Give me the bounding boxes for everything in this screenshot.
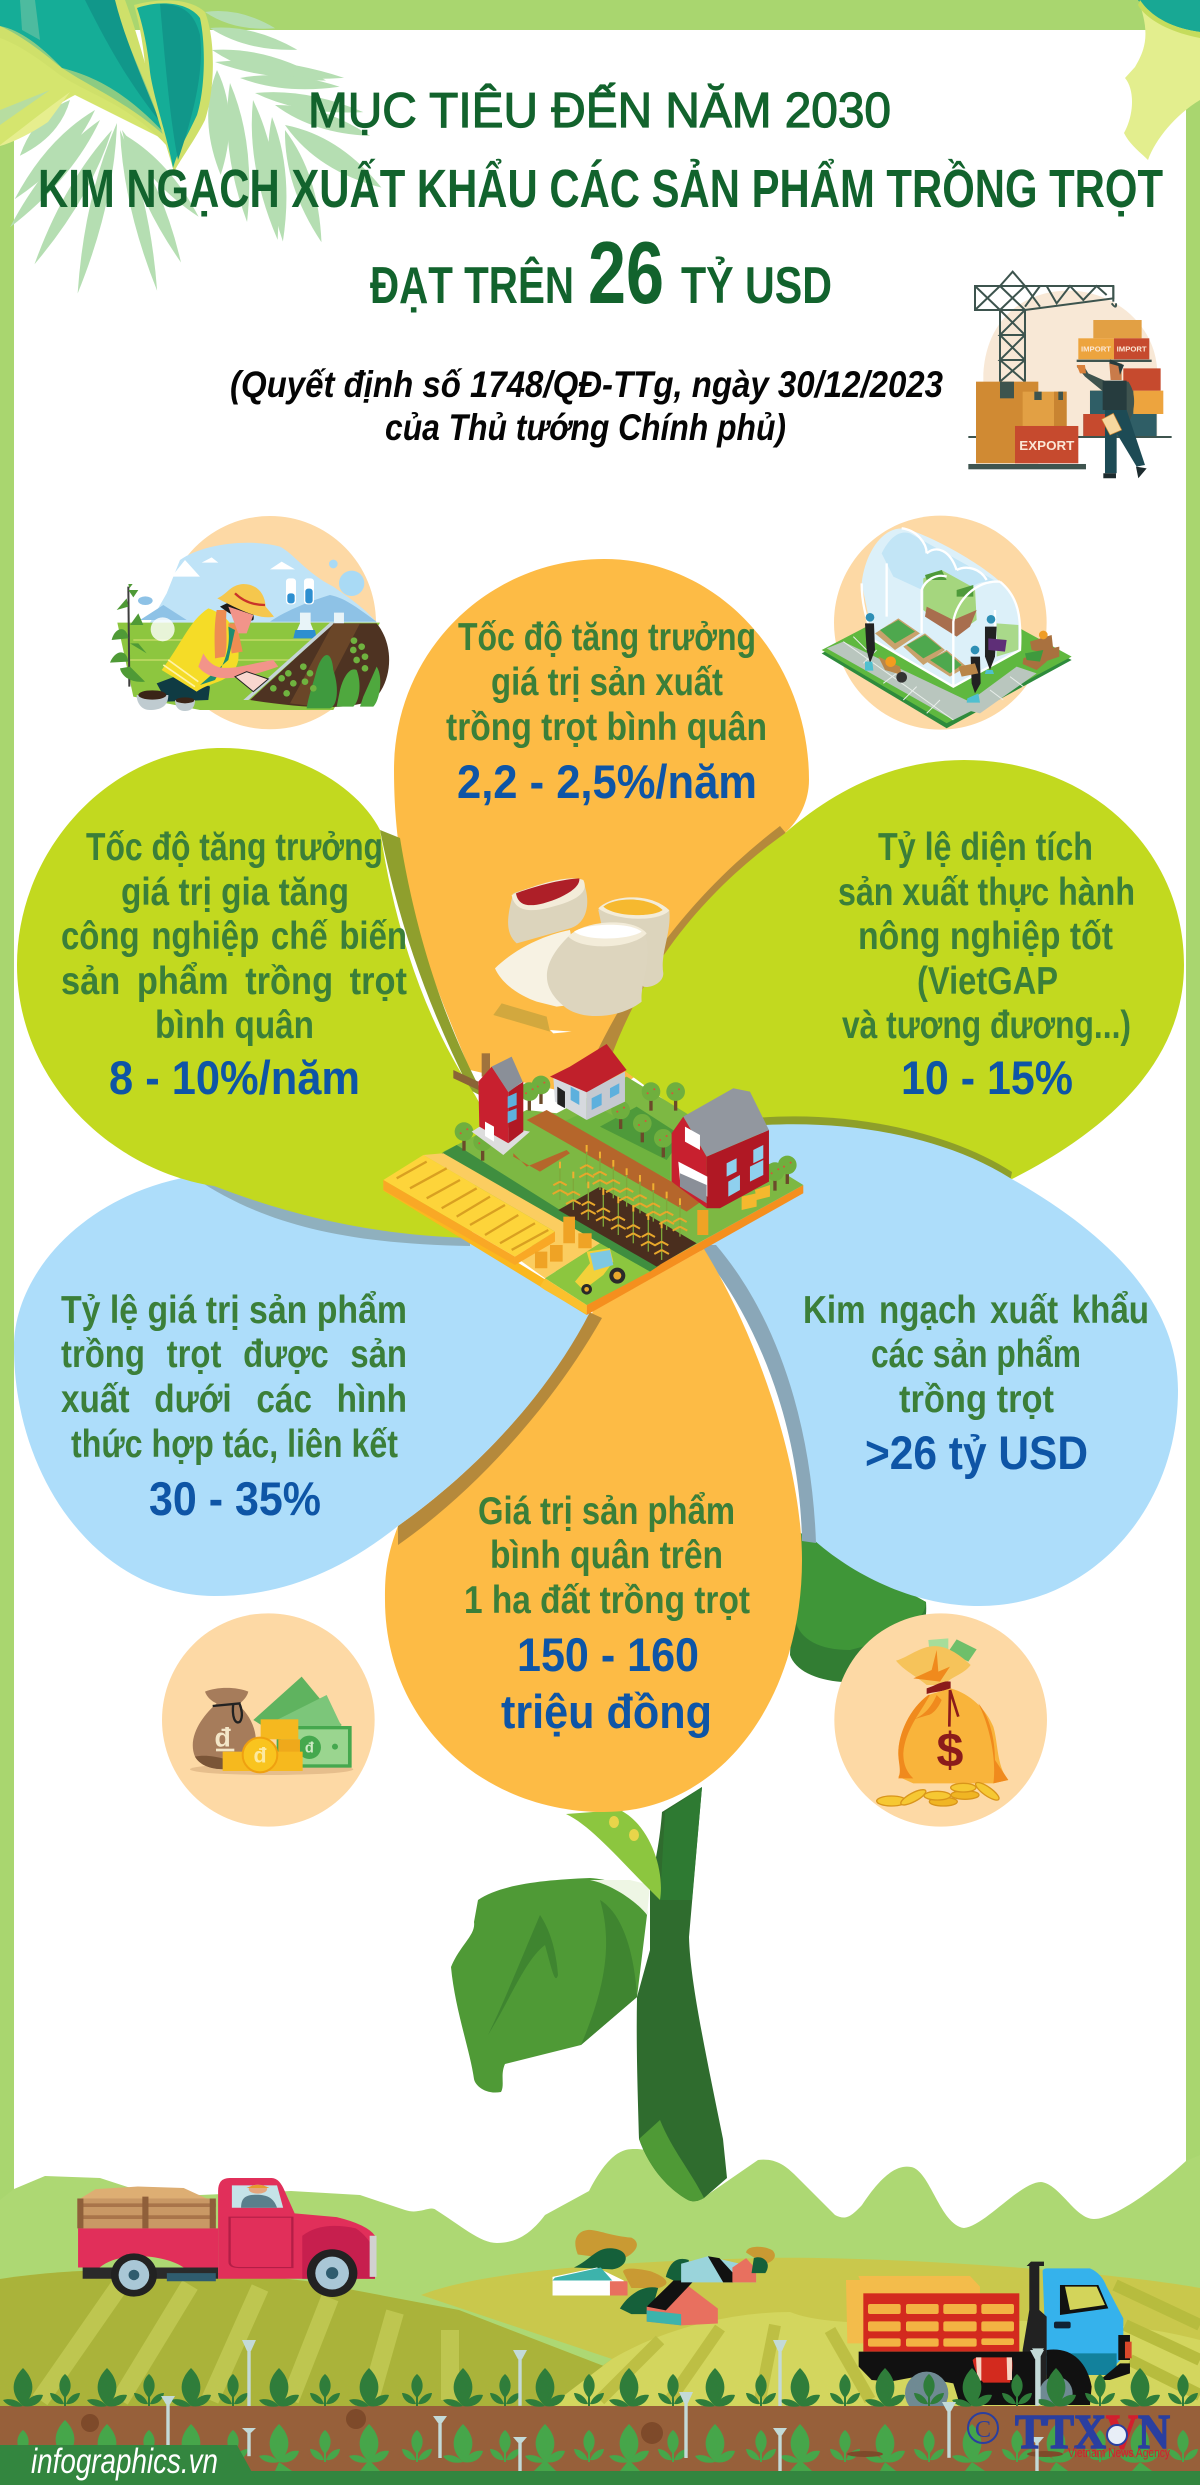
- title: TỶ USD: [681, 256, 832, 315]
- panel: bottom petal - value per hectare: [385, 1249, 802, 1812]
- panel: bottom petal - value per hectare: 150 - 160: [517, 1628, 699, 1681]
- panel: right green petal - good agricultural practice: 10 - 15%: [901, 1051, 1073, 1104]
- flower bud: [566, 1810, 661, 1900]
- lower plant row: [8, 2420, 1198, 2471]
- title: [38, 84, 1163, 322]
- subtitle: [230, 364, 943, 448]
- panel: left green petal - processing industry growth: sản phẩm trồng trọt: [61, 960, 407, 1003]
- irrigation sprinklers: [161, 2340, 1044, 2471]
- icon: money circle: đ: [253, 1744, 267, 1768]
- panel: left blue petal - cooperation share: trồng trọt được sản: [61, 1333, 407, 1376]
- panel: left blue petal - cooperation share: [14, 1175, 602, 1596]
- upper stem leaf: [790, 1530, 926, 1682]
- panel: right green petal - good agricultural practice: nông nghiệp tốt: [858, 915, 1113, 958]
- panel: right blue petal - export turnover: trồng trọt: [899, 1378, 1054, 1421]
- panel: left green petal - processing industry growth: giá trị gia tăng: [121, 871, 349, 914]
- flower stem: [637, 1787, 727, 2201]
- site label: infographics.vn: infographics.vn: [31, 2442, 218, 2481]
- icon: export crane, containers and worker: [968, 272, 1172, 478]
- icon: export crane, containers and worker: IMPORT: [1081, 345, 1112, 354]
- background landscape: hills: [0, 2149, 1200, 2420]
- panel: right green petal - good agricultural practice: sản xuất thực hành: [838, 871, 1135, 914]
- subtitle: của Thủ tướng Chính phủ): [385, 407, 786, 448]
- icon: export crane, containers and worker: EXPORT: [1019, 439, 1075, 453]
- icon: farmer and lab circle: [110, 516, 389, 729]
- panel: right green petal - good agricultural practice: (VietGAP: [917, 960, 1058, 1003]
- icon: money circle: đ: [215, 1723, 232, 1753]
- icon: blue cargo truck: [846, 2262, 1132, 2415]
- panel: right blue petal - export turnover: các sản phẩm: [871, 1333, 1081, 1376]
- icon: small houses: [553, 2230, 775, 2325]
- icon: export crane, containers and worker: IMPORT: [1117, 345, 1147, 354]
- title: 26: [588, 223, 664, 322]
- decoration: leaves top right: [1124, 0, 1200, 160]
- background landscape: field stripes: [40, 2285, 1200, 2400]
- panel: right green petal - good agricultural practice: và tương đương...): [842, 1004, 1131, 1047]
- soil stones: [81, 2409, 1063, 2457]
- icon: red pickup truck: [78, 2178, 377, 2297]
- upper plant row: [3, 2368, 1198, 2407]
- icon: money bag circle: $: [937, 1724, 964, 1778]
- panel: left blue petal - cooperation share: thức hợp tác, liên kết: [71, 1423, 398, 1466]
- bottom strip: [0, 2471, 1200, 2485]
- panel: bottom petal - value per hectare: Giá trị sản phẩm: [478, 1490, 735, 1533]
- subtitle: (Quyết định số 1748/QĐ-TTg, ngày 30/12/2023: [230, 364, 943, 405]
- lower stem leaf: [451, 1878, 650, 2093]
- panel: left blue petal - cooperation share: Tỷ lệ giá trị sản phẩm: [61, 1289, 407, 1332]
- panel: top petal - crop production growth: [394, 559, 809, 1100]
- panel: left green petal - processing industry growth: [17, 748, 500, 1246]
- panel: top petal - crop production growth: Tốc độ tăng trưởng: [458, 616, 756, 659]
- panel: right green petal - good agricultural practice: [592, 760, 1184, 1200]
- panel: left blue petal - cooperation share: 30 - 35%: [149, 1472, 321, 1525]
- panel: right blue petal - export turnover: [696, 1116, 1178, 1606]
- panel: top petal - crop production growth: giá trị sản xuất: [491, 661, 723, 704]
- title: MỤC TIÊU ĐẾN NĂM 2030: [308, 84, 891, 138]
- panel: top petal - crop production growth: 2,2 - 2,5%/năm: [457, 755, 757, 808]
- panel: left blue petal - cooperation share: xuất dưới các hình: [61, 1378, 407, 1421]
- panel: top petal - crop production growth: trồng trọt bình quân: [446, 706, 767, 749]
- illustration: isometric farm: [383, 1044, 803, 1315]
- panel: right blue petal - export turnover: >26 tỷ USD: [865, 1426, 1088, 1479]
- decoration: teal leaves top left: [0, 0, 213, 172]
- panel: left green petal - processing industry growth: bình quân: [155, 1004, 314, 1047]
- logo: TTXVN: C: [975, 2417, 991, 2443]
- icon: greenhouse circle: [822, 516, 1072, 730]
- logo: TTXVN: Vietnam News Agency: [1068, 2445, 1170, 2460]
- panel: left green petal - processing industry growth: Tốc độ tăng trưởng: [86, 826, 383, 869]
- logo: TTXVN: TTXVN: [1015, 2404, 1170, 2459]
- icon: money circle: [162, 1613, 375, 1827]
- panel: bottom petal - value per hectare: 1 ha đất trồng trọt: [464, 1579, 750, 1622]
- title: ĐẠT TRÊN: [370, 256, 574, 315]
- panel: left green petal - processing industry growth: 8 - 10%/năm: [109, 1051, 360, 1104]
- icon: grain sacks: [493, 878, 670, 1033]
- panel: right green petal - good agricultural practice: Tỷ lệ diện tích: [878, 826, 1093, 869]
- panel: left green petal - processing industry growth: công nghiệp chế biến: [61, 915, 407, 958]
- panel: bottom petal - value per hectare: triệu đồng: [501, 1685, 712, 1738]
- icon: money bag circle: [834, 1613, 1047, 1827]
- panel: right blue petal - export turnover: Kim ngạch xuất khẩu: [803, 1289, 1149, 1332]
- decoration: palm fronds top left: [4, 6, 387, 295]
- icon: money circle: đ: [305, 1740, 314, 1756]
- soil strip: [0, 2406, 1200, 2472]
- panel: bottom petal - value per hectare: bình quân trên: [490, 1534, 723, 1577]
